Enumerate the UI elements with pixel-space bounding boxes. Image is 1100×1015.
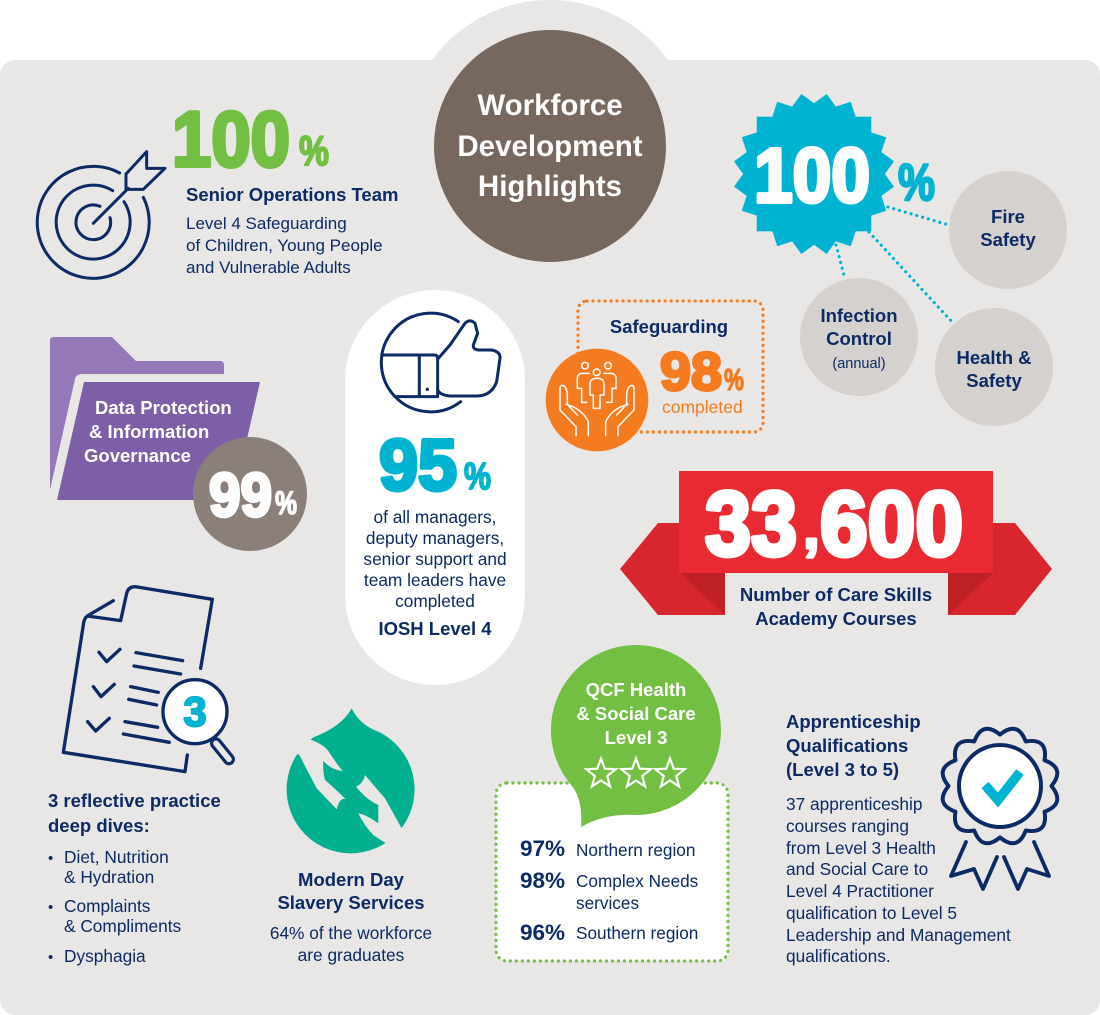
text: apprenticeship body (786, 794, 1011, 966)
text: modern day slavery: are graduates (298, 945, 405, 965)
panel: modern day slavery (270, 708, 432, 965)
bubble: fire safety: Safety (980, 229, 1036, 250)
icon: target with arrow (37, 152, 165, 278)
text: care skills caption: Number of Care Skills (740, 584, 932, 605)
text: deep dives heading (48, 790, 221, 836)
dotted connectors (836, 207, 953, 323)
panel: care skills academy ribbon (620, 471, 1052, 629)
row: complex needs: Complex Needs (576, 871, 698, 891)
stat: 33,600: , (803, 494, 820, 561)
row: complex needs: 98% (520, 868, 565, 893)
bubble: fire safety: Fire (991, 206, 1025, 227)
row: northern region (520, 836, 695, 861)
row: northern region: 97% (520, 836, 565, 861)
text: managers: of all managers, (374, 507, 496, 527)
panel: safeguarding (546, 301, 763, 451)
text: apprenticeship body: 37 apprenticeship (786, 794, 922, 814)
text: apprenticeship heading: Apprenticeship (786, 711, 921, 732)
stat: 100% white on blue: 100 (754, 133, 870, 219)
icon: rosette with tick (943, 729, 1057, 889)
title: Workforce (477, 89, 623, 122)
icon: three stars (586, 758, 685, 786)
title: Highlights (478, 170, 622, 203)
stat: 33,600 (705, 474, 963, 575)
bubble: health and safety: Health & (956, 347, 1032, 368)
text: managers: senior support and (363, 549, 507, 569)
ribbon wings (620, 523, 1052, 615)
text: apprenticeship body: qualifications. (786, 946, 891, 966)
panel: 100% mandatory training (734, 94, 1067, 426)
icon: folder front (57, 382, 260, 500)
icon: starburst (734, 94, 894, 254)
bubble: health and safety (935, 308, 1053, 426)
text: apprenticeship body: and Social Care to (786, 859, 928, 879)
stat: 95%: 95 (379, 426, 457, 506)
bubble: infection control: Control (826, 328, 892, 349)
stat: 99%: % (275, 485, 297, 521)
text: data protection: Data Protection (95, 397, 232, 418)
stat: 95%: % (464, 456, 491, 498)
stat: 98%: 98 (660, 342, 722, 402)
text: deep dives list: Complaints (64, 896, 151, 916)
title: Development (457, 130, 643, 163)
stat: 33,600: 600 (820, 474, 963, 575)
text: managers (363, 507, 507, 639)
text: modern day slavery: Modern Day (298, 869, 405, 890)
bubble: infection control (800, 278, 918, 396)
text: apprenticeship heading: (Level 3 to 5) (786, 759, 899, 780)
text: care skills caption (740, 584, 932, 629)
heading: safeguarding: Safeguarding (610, 316, 728, 337)
text: deep dives list (48, 847, 182, 966)
row: complex needs (520, 868, 698, 913)
bubble: infection control: (annual) (832, 356, 886, 372)
panel: IOSH Level 4 pill (345, 290, 525, 685)
text: care skills caption: Academy Courses (755, 608, 917, 629)
text: managers: completed (395, 591, 475, 611)
row: northern region: Northern region (576, 840, 695, 860)
text: apprenticeship body: Level 4 Practitioner (786, 881, 934, 901)
panel: apprenticeship qualifications (786, 711, 1057, 966)
bubble: infection control: Infection (820, 305, 898, 326)
icon: checklist with magnifier (63, 587, 229, 772)
row: southern region: 96% (520, 920, 565, 945)
icon: people in hands (546, 349, 648, 451)
row: southern region (520, 920, 698, 945)
text: modern day slavery (270, 869, 432, 965)
text: deep dives list: • (48, 949, 53, 966)
panel: reflective practice (48, 587, 229, 966)
text: data protection: Governance (84, 445, 191, 466)
icon: drop with hands (283, 708, 420, 863)
ribbon main band (679, 471, 993, 573)
bubble: fire safety (949, 171, 1067, 289)
text: deep dives list: • (48, 850, 53, 867)
text: completed: completed (662, 397, 743, 417)
text: deep dives list: & Compliments (64, 916, 182, 936)
text: apprenticeship body: courses ranging (786, 816, 909, 836)
text: senior operations team (186, 184, 398, 277)
stat: 98%: % (724, 362, 744, 397)
number in magnifier: 3 (183, 688, 207, 735)
text: apprenticeship body: qualification to Level 5 (786, 903, 957, 923)
icon: thumbs up (381, 313, 500, 412)
text: apprenticeship body: Leadership and Management (786, 925, 1011, 945)
text: modern day slavery: Slavery Services (277, 892, 425, 913)
text: managers: team leaders have (364, 570, 506, 590)
text: deep dives heading: 3 reflective practice (48, 790, 221, 811)
text: deep dives heading: deep dives: (48, 815, 150, 836)
text: senior operations team: Level 4 Safeguarding (186, 214, 347, 233)
text: data protection: & Information (89, 421, 209, 442)
panel: senior operations team (37, 95, 398, 278)
text: managers: IOSH Level 4 (378, 618, 492, 639)
text: deep dives list: Diet, Nutrition (64, 847, 169, 867)
text: data protection (84, 397, 232, 466)
text: QCF heading: QCF Health (586, 679, 686, 700)
row: complex needs: services (576, 893, 639, 913)
speech bubble (551, 645, 721, 827)
text: managers: deputy managers, (366, 528, 504, 548)
text: senior operations team: of Children, Young People (186, 236, 383, 255)
text: apprenticeship heading: Qualifications (786, 735, 908, 756)
bubble: health and safety: Safety (966, 370, 1022, 391)
row: southern region: Southern region (576, 923, 698, 943)
text: senior operations team: and Vulnerable Adults (186, 258, 351, 277)
stat: 99%: 99 (209, 461, 272, 529)
stat: 100% green: % (299, 127, 329, 174)
text: modern day slavery: 64% of the workforce (270, 923, 432, 943)
stat: 100% white on blue: % (898, 154, 935, 212)
title (434, 30, 666, 262)
stat: 99% (193, 437, 307, 551)
text: deep dives list: Dysphagia (64, 946, 146, 966)
text: senior operations team: Senior Operations Team (186, 184, 398, 205)
panel: data protection folder (50, 337, 307, 551)
text: apprenticeship body: from Level 3 Health (786, 838, 936, 858)
text: deep dives list: • (48, 899, 53, 916)
text: QCF heading: & Social Care (576, 703, 696, 724)
text: QCF heading (576, 679, 696, 748)
icon: folder back (50, 337, 224, 490)
text: apprenticeship heading (786, 711, 921, 780)
text: deep dives list: & Hydration (64, 867, 154, 887)
stat: 33,600: 33 (705, 474, 797, 575)
text: QCF heading: Level 3 (605, 727, 667, 748)
stat: 100% green: 100 (172, 95, 290, 183)
panel: QCF health and social care (496, 645, 728, 961)
